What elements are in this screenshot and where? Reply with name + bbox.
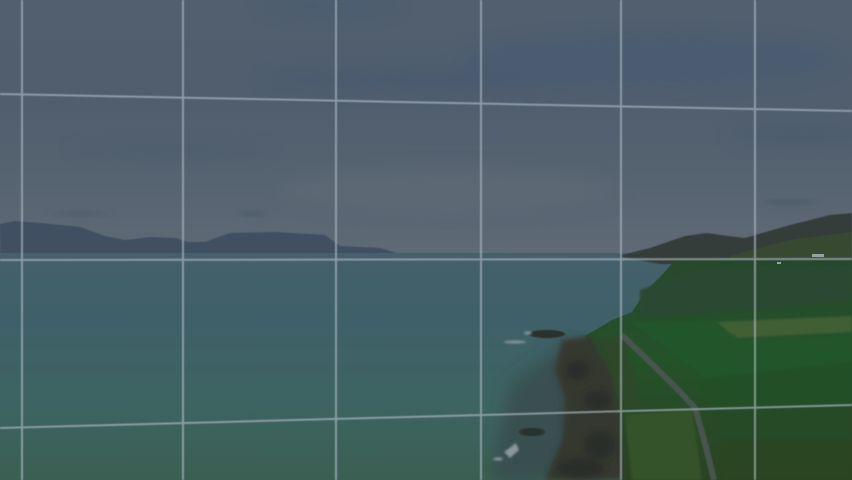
sky	[0, 0, 852, 256]
sea	[0, 253, 852, 480]
road	[622, 335, 714, 480]
green fields	[585, 258, 852, 480]
shaded sea patch by shore	[490, 340, 600, 480]
headland hills	[618, 213, 852, 264]
distant mountains	[0, 221, 400, 254]
field details	[595, 266, 852, 480]
rocky shore	[493, 330, 622, 480]
white houses	[777, 254, 824, 264]
